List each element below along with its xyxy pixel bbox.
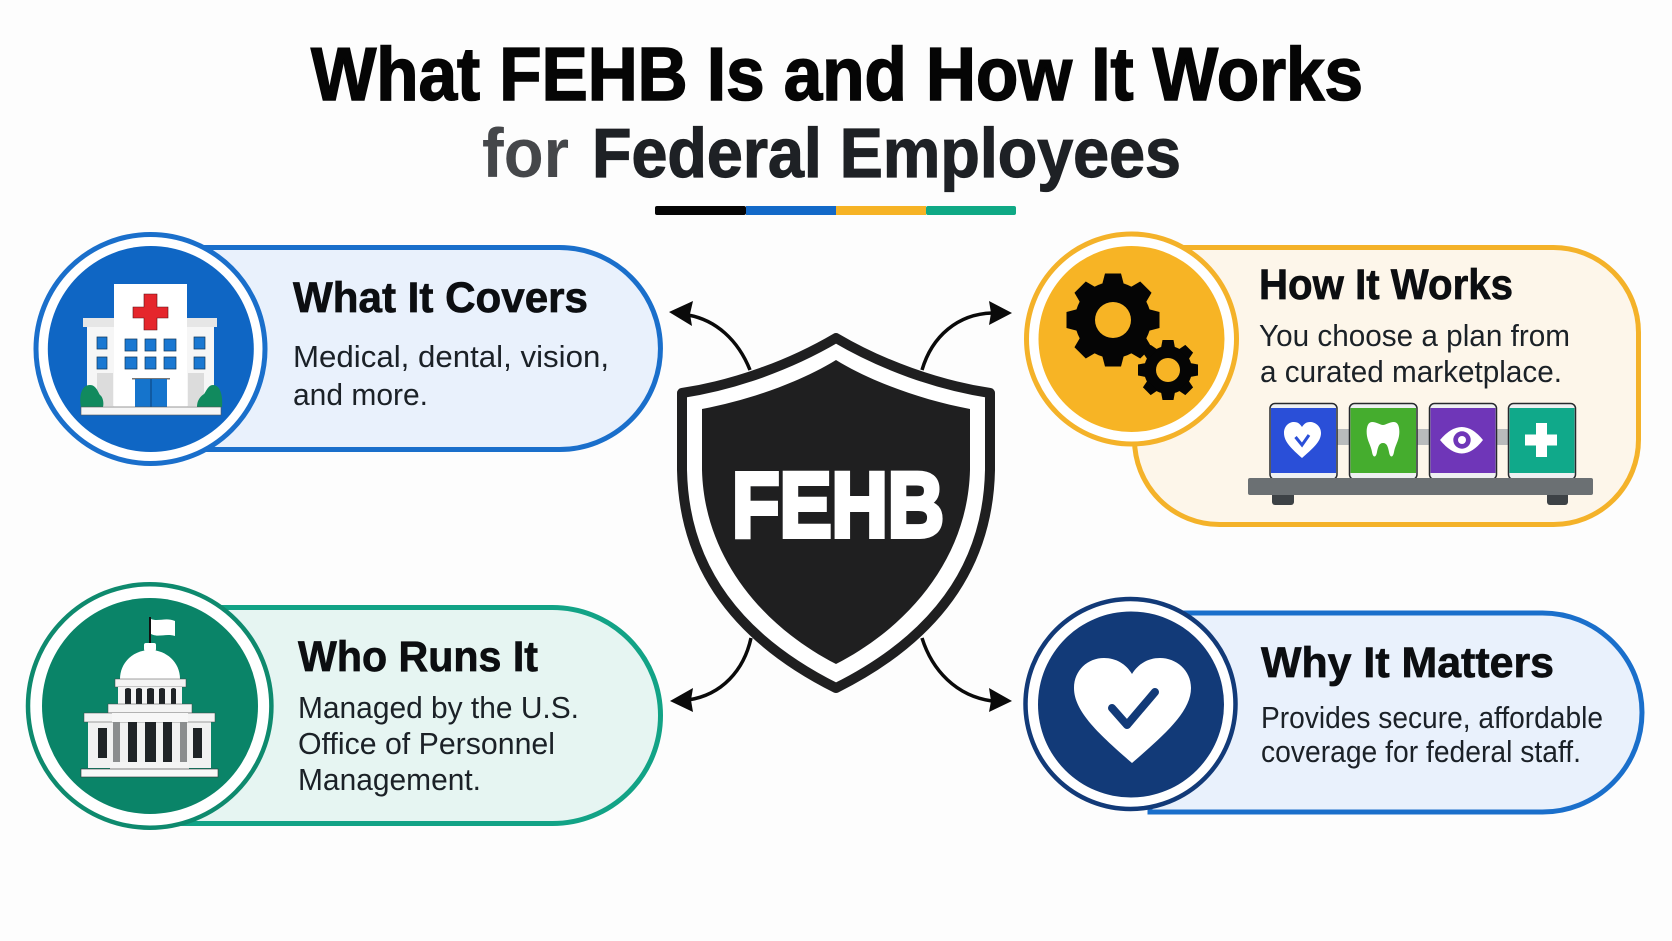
icon: heart check badge: [1026, 599, 1236, 809]
arrow: to How It Works: [922, 301, 1012, 370]
card: dental: [1350, 404, 1417, 480]
marketplace shelf with plan cards: [1248, 404, 1593, 505]
arrow: to What It Covers: [669, 301, 750, 370]
pill background: [170, 608, 660, 824]
body text: [298, 690, 579, 797]
body text: [1261, 700, 1603, 769]
title underline colour bar: [655, 206, 1016, 215]
panel: Why It Matters: [1026, 599, 1642, 812]
card: medical: [1270, 404, 1337, 480]
heading: Who Runs It: [298, 633, 538, 681]
pill background: [150, 248, 660, 450]
central FEHB shield: FEHB: [732, 454, 944, 556]
title: What FEHB Is and How It Works: [311, 32, 1363, 116]
icon: gears badge: [1026, 234, 1236, 444]
central FEHB shield: [682, 338, 990, 688]
title: Federal Employees: [592, 114, 1181, 192]
icon: small gear: [1138, 340, 1198, 400]
panel: How It Works: [1026, 234, 1638, 524]
pill background: [1150, 613, 1642, 812]
icon: large gear: [1066, 274, 1160, 366]
heading: What It Covers: [293, 274, 588, 322]
body text: Office of Personnel: [298, 726, 555, 761]
body text: Management.: [298, 762, 481, 797]
panel: Who Runs It: [28, 584, 660, 828]
card: vision: [1430, 404, 1496, 480]
panel: What It Covers: [36, 234, 660, 464]
card: general health: [1508, 404, 1576, 480]
body text: [1259, 318, 1570, 389]
icon: hospital badge: [36, 234, 265, 464]
pill background: [1134, 248, 1638, 524]
body text: Provides secure, affordable: [1261, 700, 1603, 735]
body text: and more.: [293, 377, 428, 412]
body text: a curated marketplace.: [1260, 354, 1562, 389]
icon: capitol badge: [28, 584, 271, 828]
body text: You choose a plan from: [1259, 318, 1570, 353]
body text: coverage for federal staff.: [1261, 734, 1581, 769]
body text: Managed by the U.S.: [298, 690, 579, 725]
body text: Medical, dental, vision,: [293, 339, 609, 374]
heading: How It Works: [1259, 261, 1513, 309]
title: [311, 32, 1363, 192]
title: for: [482, 114, 569, 192]
arrow: to Why It Matters: [922, 638, 1012, 712]
arrow: to Who Runs It: [670, 638, 751, 712]
body text: [293, 339, 609, 412]
heading: Why It Matters: [1261, 639, 1554, 687]
